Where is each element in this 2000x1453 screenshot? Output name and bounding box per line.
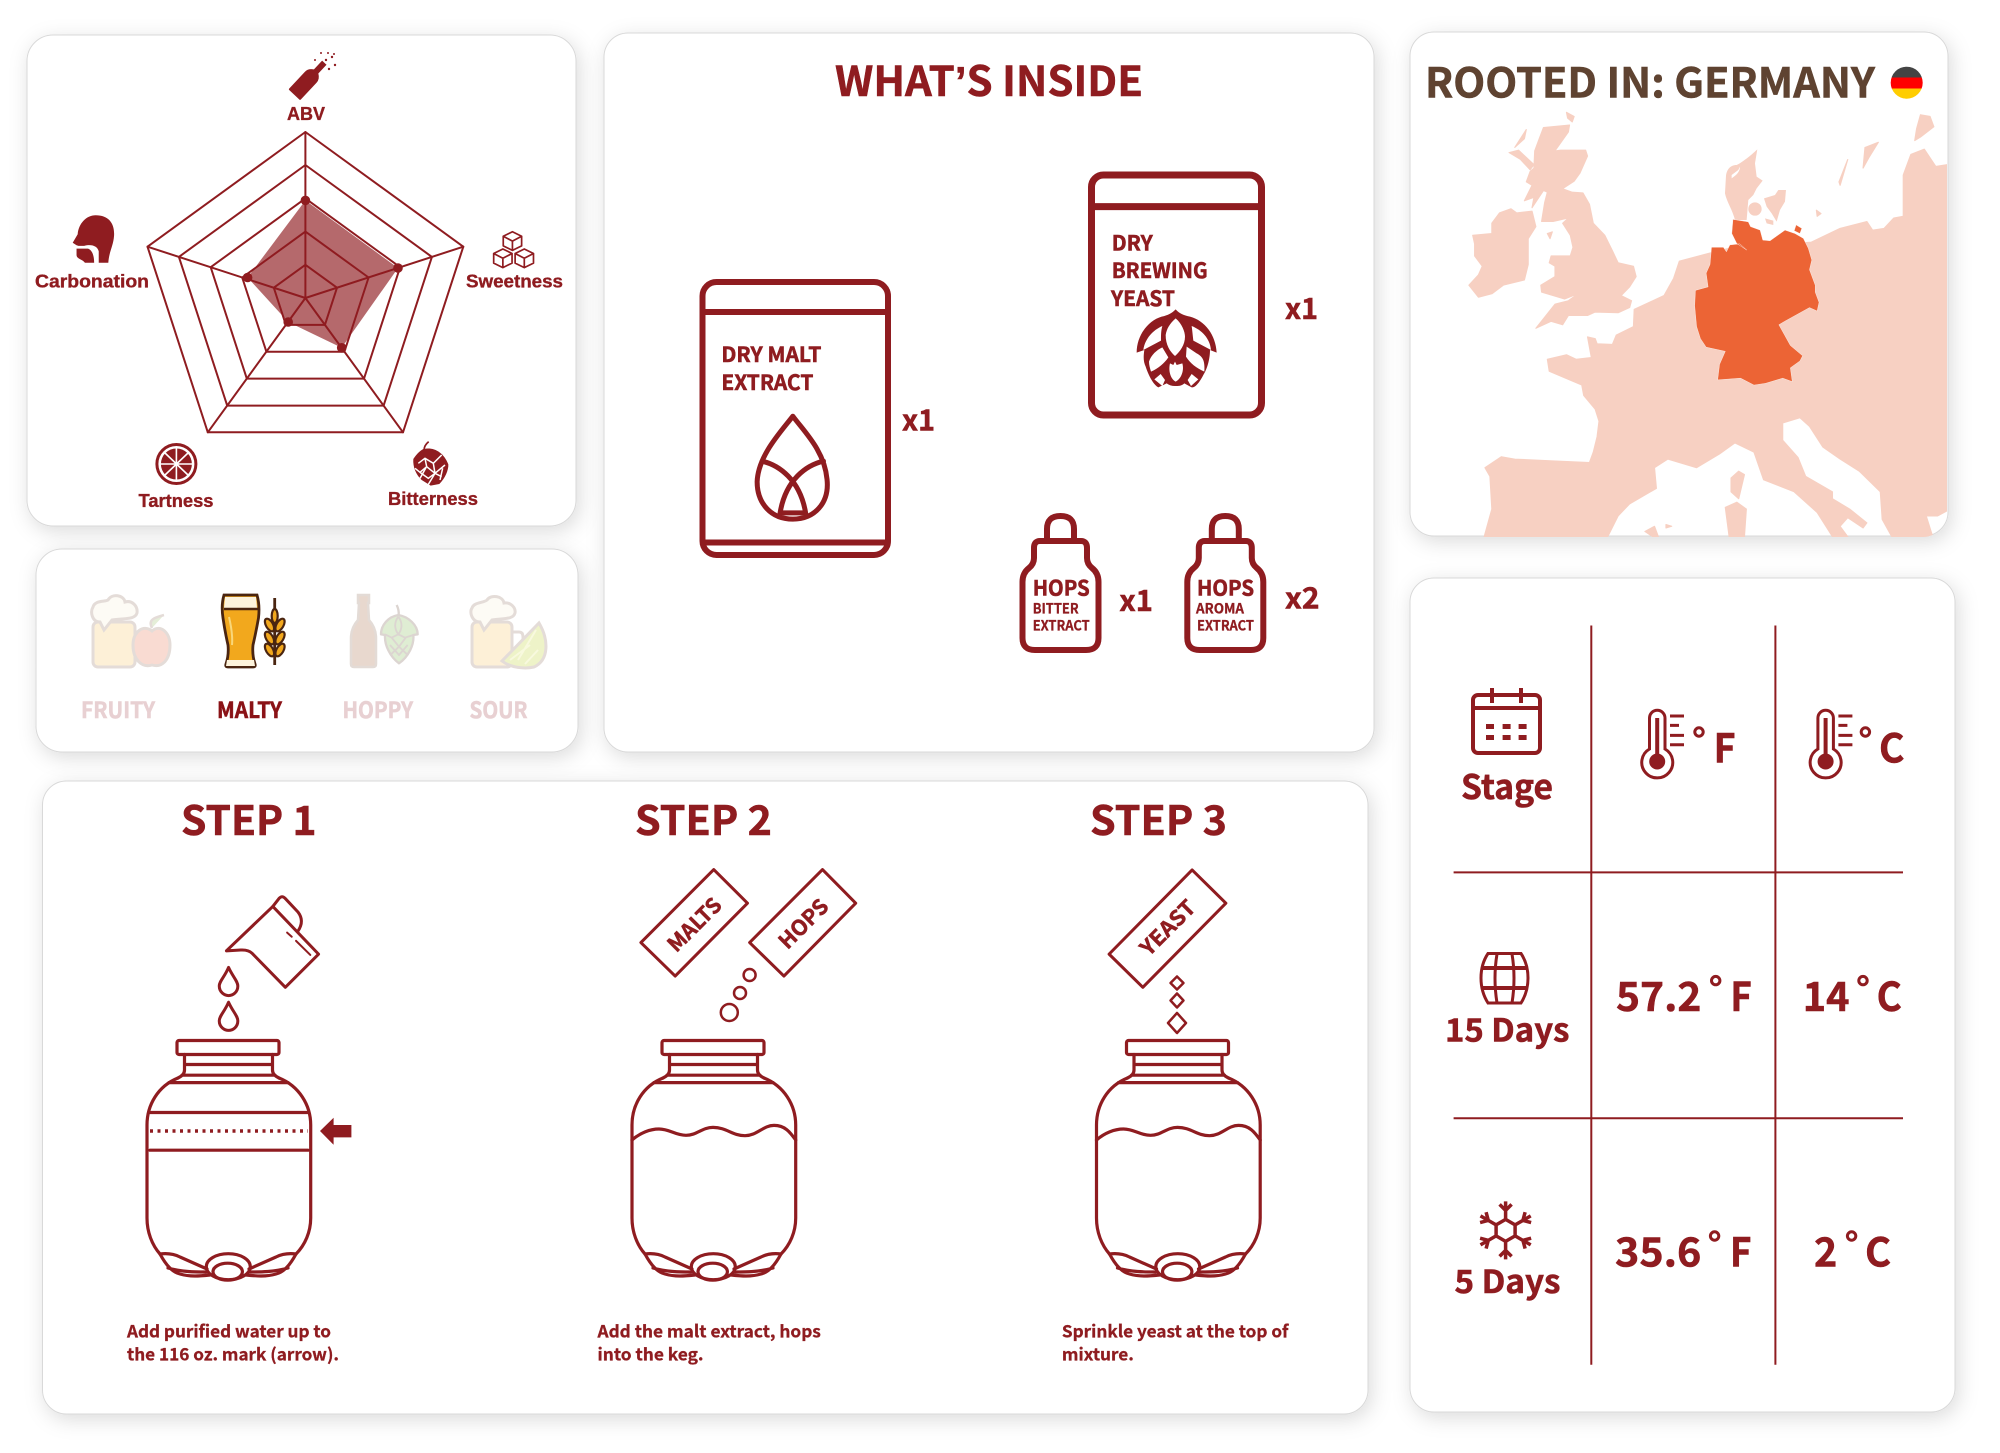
unit: degrees C: C — [1879, 717, 1904, 775]
label: extract: EXTRACT — [1033, 616, 1090, 636]
label: FRUITY: FRUITY — [81, 693, 155, 725]
step 2 text: into the keg. — [598, 1340, 704, 1365]
quantity: bitter x1: x1 — [1119, 578, 1153, 620]
map of europe — [1469, 112, 1947, 537]
step 3 text — [1062, 1318, 1289, 1365]
icon: calendar — [1473, 688, 1540, 753]
value: 57.2 F: F — [1730, 965, 1752, 1023]
icon: keg with wort — [632, 1040, 796, 1280]
icon: barrel — [1481, 954, 1528, 1003]
panel: beer style — [36, 549, 578, 752]
neighbouring countries — [1469, 112, 1947, 537]
icon: thermometer celsius — [1810, 710, 1852, 778]
quantity: yeast x1: x1 — [1285, 286, 1318, 328]
step 2 text — [596, 1318, 821, 1365]
table grid — [1454, 626, 1903, 1365]
icon: yeast granules — [1168, 976, 1186, 1033]
denmark — [1725, 149, 1786, 225]
icon: falling bubbles — [721, 969, 756, 1021]
icon: yeast packet: YEAST — [1132, 893, 1202, 963]
icon: german flag — [1890, 66, 1924, 100]
icon: malty glass and wheat — [222, 595, 287, 667]
panel: rooted in germany — [1410, 32, 1948, 537]
icon: snowflake — [1477, 1201, 1534, 1259]
label: 5 days: 5 Days — [1454, 1257, 1560, 1303]
unit: degrees C — [1861, 717, 1904, 775]
bottle: hops aroma extract — [1187, 516, 1263, 650]
value: 2 C: 2 — [1814, 1220, 1837, 1278]
heading: step 2: STEP 2 — [635, 788, 772, 847]
icon: hops packet — [750, 870, 856, 976]
label: aroma: AROMA — [1195, 598, 1245, 618]
unit: degrees F — [1695, 717, 1736, 775]
panel: fermentation table — [1410, 578, 1955, 1412]
quantity: malt x1: x1 — [902, 398, 935, 440]
label: dry malt: DRY MALT — [721, 339, 821, 369]
icon: citrus slice — [157, 444, 196, 484]
icon: keg with fill mark — [147, 1040, 311, 1280]
bag: dry brewing yeast — [1090, 175, 1263, 415]
panel: what's inside — [604, 33, 1374, 752]
icon: malts packet: MALTS — [660, 890, 728, 958]
value: 14 C — [1803, 965, 1902, 1023]
label: ABV: ABV — [287, 104, 325, 124]
value: 57.2 F: 57.2 — [1616, 965, 1701, 1023]
value: 57.2 F — [1616, 965, 1752, 1023]
bag: dry malt extract — [701, 282, 889, 555]
panel: steps — [42, 781, 1368, 1414]
panel: flavor radar — [27, 35, 576, 526]
value: 2 C — [1814, 1220, 1891, 1278]
value: 2 C: C — [1865, 1220, 1891, 1278]
icon: hop outline — [1137, 309, 1217, 387]
step 3 text: mixture. — [1062, 1340, 1134, 1365]
icon: hoppy bottle and hop — [351, 595, 418, 667]
arrow: fill mark — [320, 1118, 351, 1145]
label: extract: EXTRACT — [1197, 616, 1254, 636]
label: MALTY: MALTY — [217, 693, 282, 725]
step 1 text: Add purified water up to — [126, 1318, 331, 1343]
label: Tartness: Tartness — [138, 491, 214, 511]
step 1 text — [126, 1318, 339, 1365]
icon: malts packet — [641, 870, 747, 976]
heading: what's inside: WHAT’S INSIDE — [835, 48, 1143, 108]
value: 35.6 F: 35.6 — [1615, 1220, 1701, 1278]
label: stage: Stage — [1461, 760, 1553, 809]
step 2 text: Add the malt extract, hops — [596, 1318, 821, 1343]
label: hops: HOPS — [1197, 573, 1254, 603]
label: SOUR: SOUR — [470, 693, 528, 725]
icon: hop cone — [413, 442, 448, 486]
icon: malt drop — [757, 416, 827, 519]
quantity: aroma x2: x2 — [1285, 576, 1320, 618]
label: hops: HOPS — [1033, 573, 1090, 603]
germany highlighted — [1695, 219, 1819, 385]
icon: bottle popping — [288, 52, 336, 100]
bottle: hops bitter extract — [1022, 516, 1098, 650]
label: brewing: BREWING — [1112, 255, 1208, 285]
step 3 text: Sprinkle yeast at the top of — [1062, 1318, 1289, 1343]
value: 14 C: 14 — [1803, 965, 1850, 1023]
label: bitter: BITTER — [1033, 598, 1079, 618]
unit: degrees F: F — [1714, 717, 1736, 775]
icon: fruity mug and apple — [92, 596, 170, 667]
label: extract: EXTRACT — [721, 367, 813, 397]
value: 14 C: C — [1877, 965, 1902, 1023]
label: Sweetness: Sweetness — [466, 272, 563, 292]
value: 35.6 F: F — [1730, 1220, 1752, 1278]
step 1 text: the 116 oz. mark (arrow). — [127, 1340, 339, 1365]
icon: yeast packet — [1109, 870, 1226, 987]
icon: hops packet: HOPS — [771, 892, 835, 955]
heading: step 1: STEP 1 — [181, 788, 316, 847]
label: yeast: YEAST — [1110, 283, 1175, 313]
heading: rooted in germany: ROOTED IN: GERMANY — [1425, 50, 1876, 110]
icon: pouring jug and drops — [219, 897, 319, 1030]
heading: step 3: STEP 3 — [1090, 788, 1227, 847]
icon: thermometer fahrenheit — [1642, 710, 1684, 778]
label: Carbonation: Carbonation — [35, 272, 149, 292]
value: 35.6 F — [1615, 1220, 1752, 1278]
icon: keg with wort — [1096, 1040, 1260, 1280]
icon: sour mug and lime — [471, 596, 546, 668]
label: 15 days: 15 Days — [1445, 1006, 1569, 1052]
label: HOPPY: HOPPY — [342, 693, 413, 725]
radar chart — [148, 132, 463, 432]
label: dry: DRY — [1112, 228, 1154, 258]
icon: head and throat — [73, 215, 114, 263]
label: Bitterness: Bitterness — [388, 489, 478, 509]
icon: sugar cubes — [494, 232, 533, 268]
